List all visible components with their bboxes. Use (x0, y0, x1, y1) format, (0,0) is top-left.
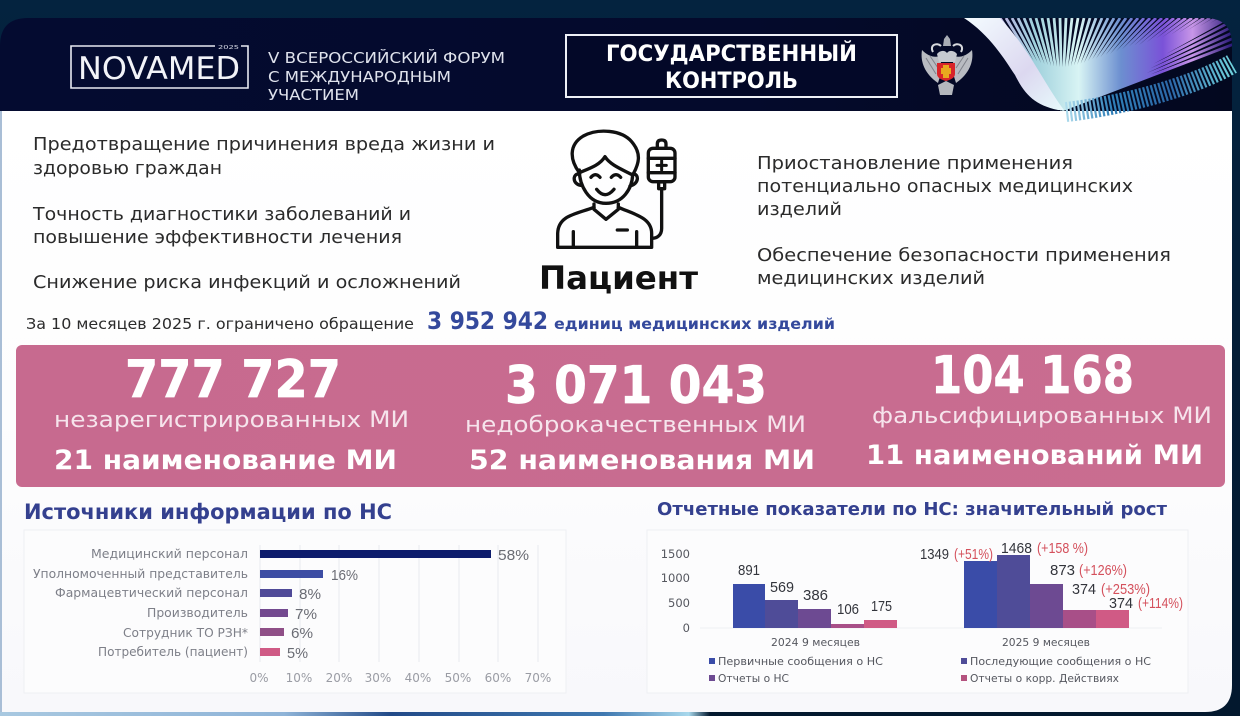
bar chart: reporting indicators: (+158 %) (1037, 541, 1088, 557)
icon: emblem (922, 35, 972, 95)
bar chart: reporting indicators: 1468 (1001, 540, 1032, 557)
bar chart: reporting indicators: 175 (871, 598, 892, 615)
bar chart: reporting indicators: 106 (837, 601, 859, 618)
bar chart: reporting indicators: 500 (668, 596, 690, 610)
stat: substandard: 52 наименования МИ (469, 445, 815, 476)
bar chart: information sources: 40% (405, 671, 431, 685)
text block: right benefits: изделий (757, 199, 842, 220)
text block: right benefits: Обеспечение безопасности применения (757, 245, 1171, 266)
stat: unregistered: незарегистрированных МИ (54, 408, 409, 433)
bar chart: reporting indicators: 1349 (920, 546, 949, 563)
text block: right benefits (757, 153, 1171, 289)
text block: left benefits (32, 134, 495, 293)
title box (566, 35, 897, 97)
summary line: За 10 месяцев 2025 г. ограничено обращение (26, 315, 414, 333)
forum caption: V ВСЕРОССИЙСКИЙ ФОРУМ (268, 48, 505, 67)
bar chart: information sources: 16% (331, 567, 358, 584)
stat: substandard (465, 356, 815, 476)
legend (709, 655, 1151, 685)
icon: patient with IV drip (558, 131, 675, 247)
stat: falsified (866, 346, 1212, 471)
forum caption (268, 48, 505, 104)
header wave (1066, 64, 1232, 112)
bar chart: reporting indicators: 0 (683, 621, 690, 635)
bar chart: reporting indicators: 873 (1050, 562, 1075, 579)
bar chart: information sources: Уполномоченный представитель (33, 567, 248, 581)
text block: left benefits: Предотвращение причинения вреда жизни и (33, 134, 495, 155)
bar chart: information sources: 60% (485, 671, 511, 685)
summary line: 3 952 942 (427, 307, 548, 335)
stat: unregistered: 21 наименование МИ (54, 445, 397, 476)
title box: КОНТРОЛЬ (665, 69, 798, 94)
forum caption: УЧАСТИЕМ (268, 86, 359, 104)
panel: restricted devices (16, 345, 1225, 487)
text block: left benefits: Точность диагностики заболеваний и (32, 204, 411, 225)
text block: right benefits: Приостановление применения (757, 153, 1073, 174)
stat: substandard: 3 071 043 (505, 356, 767, 416)
bar chart: information sources: 6% (291, 625, 313, 642)
bar chart: reporting indicators (647, 530, 1188, 693)
bar chart: reporting indicators: 891 (738, 562, 760, 579)
legend: Первичные сообщения о НС (718, 655, 883, 668)
bar chart: information sources: 5% (287, 645, 308, 662)
heading: reporting indicators: Отчетные показатели по НС: значительный рост (657, 499, 1168, 520)
stat: substandard: недоброкачественных МИ (465, 413, 806, 438)
bar chart: information sources: 7% (295, 606, 317, 623)
bar chart: reporting indicators: 2025 9 месяцев (1002, 636, 1090, 649)
legend: Отчеты о НС (718, 672, 789, 685)
logo: NOVAMED: NOVAMED (78, 51, 240, 87)
bar chart: information sources: 0% (249, 671, 269, 685)
bar chart: reporting indicators: 1000 (661, 571, 690, 585)
stat: unregistered (54, 350, 409, 476)
bar chart: information sources: 20% (326, 671, 352, 685)
forum caption: С МЕЖДУНАРОДНЫМ (268, 68, 451, 86)
bar chart: information sources: Медицинский персонал (91, 547, 248, 561)
text block: right benefits: потенциально опасных медицинских (757, 176, 1133, 197)
text block: right benefits: медицинских изделий (757, 268, 985, 289)
legend: Отчеты о корр. Действиях (970, 672, 1119, 685)
bar chart: reporting indicators: 2024 9 месяцев (771, 636, 860, 649)
bar chart: reporting indicators: (+114%) (1138, 596, 1183, 612)
legend: Последующие сообщения о НС (970, 655, 1151, 668)
bar chart: information sources: Производитель (147, 606, 248, 620)
text block: left benefits: Снижение риска инфекций и осложнений (33, 272, 461, 293)
bar chart: reporting indicators: 1500 (661, 547, 690, 561)
heading: patient: Пациент (539, 259, 698, 297)
bar chart: reporting indicators: (+51%) (954, 547, 993, 563)
text block: left benefits: здоровью граждан (33, 158, 222, 179)
bar chart: reporting indicators: 386 (803, 587, 828, 604)
logo: NOVAMED: 2025 (218, 45, 240, 51)
bar chart: information sources: 50% (445, 671, 471, 685)
summary line (26, 307, 835, 335)
title box: ГОСУДАРСТВЕННЫЙ (606, 41, 857, 67)
bar chart: reporting indicators: (+253%) (1101, 582, 1150, 598)
bar chart: information sources: Фармацевтический персонал (55, 586, 248, 600)
bar chart: information sources: 10% (286, 671, 312, 685)
text block: left benefits: повышение эффективности лечения (33, 227, 402, 248)
bar chart: reporting indicators: (+126%) (1079, 563, 1127, 579)
stat: falsified: фальсифицированных МИ (872, 404, 1212, 429)
bar chart: information sources: Потребитель (пациент) (98, 645, 248, 659)
summary line: единиц медицинских изделий (554, 315, 835, 333)
bar chart: information sources: 58% (498, 547, 529, 564)
stat: falsified: 11 наименований МИ (866, 440, 1203, 471)
bar chart: reporting indicators: 569 (770, 579, 794, 596)
bar chart: information sources: Сотрудник ТО РЗН* (123, 626, 248, 640)
bar chart: reporting indicators: 374 (1072, 581, 1096, 598)
bar chart: information sources (24, 530, 566, 693)
bar chart: reporting indicators: 374 (1109, 595, 1133, 612)
stat: falsified: 104 168 (931, 346, 1134, 406)
heading: information sources: Источники информации по НС (24, 500, 392, 524)
bar chart: information sources: 70% (525, 671, 551, 685)
bar chart: information sources: 30% (365, 671, 391, 685)
bar chart: information sources: 8% (299, 586, 321, 603)
stat: unregistered: 777 727 (125, 350, 341, 410)
